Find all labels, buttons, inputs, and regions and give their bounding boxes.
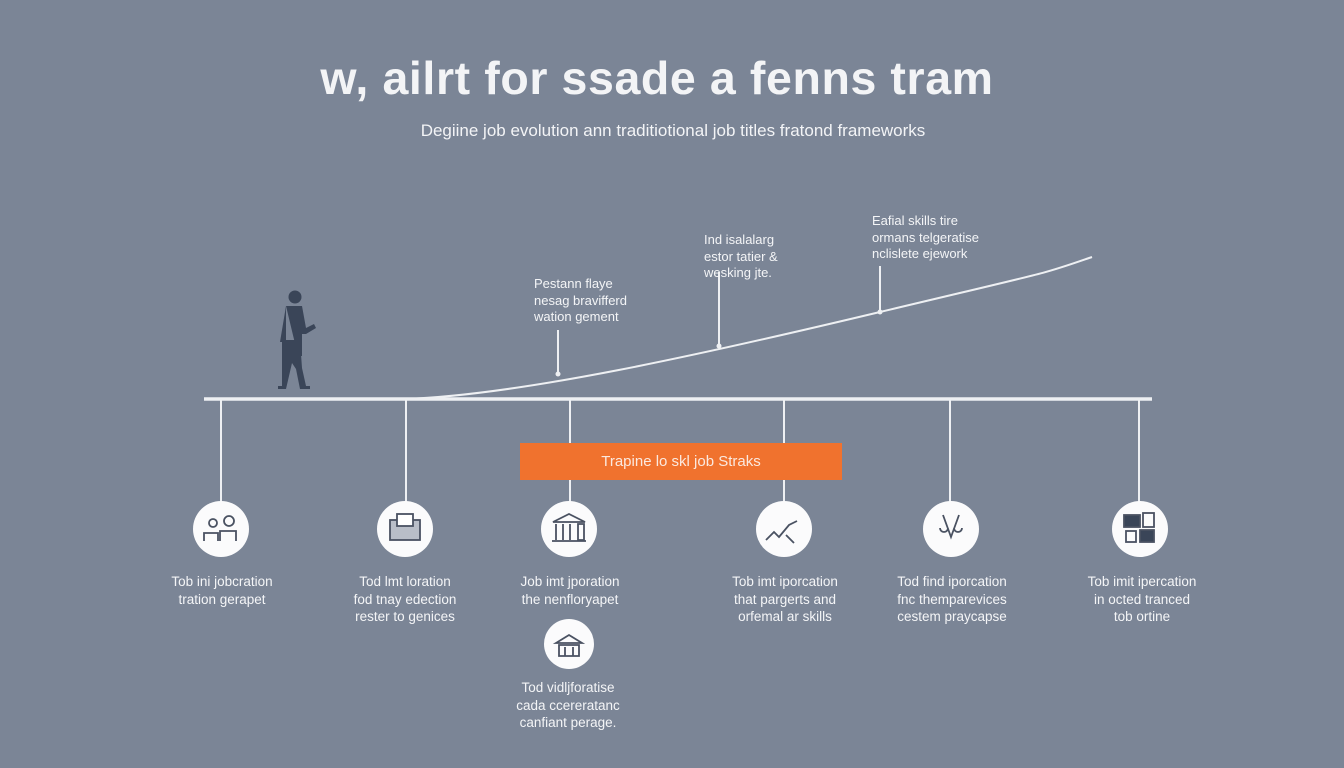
text: item 6: Tob imit ipercation <box>1088 574 1196 589</box>
callout: milestone 2: wesking jte. <box>704 265 772 280</box>
callout: milestone 3: Eafial skills tire <box>872 213 958 228</box>
text: item 3b: cada ccereratanc <box>516 698 620 712</box>
text: item 3 <box>520 574 620 607</box>
text: item 1: tration gerapet <box>178 592 266 606</box>
icon: person walking <box>278 290 316 389</box>
text: item 5 <box>897 574 1007 624</box>
text: item 6 <box>1088 574 1196 624</box>
subtitle: Degiine job evolution ann traditiotional job titles fratond frameworks <box>421 121 925 140</box>
text: item 3: Job imt jporation <box>520 574 620 589</box>
orange banner <box>520 443 842 480</box>
text: item 4: orfemal ar skills <box>738 609 832 624</box>
text: item 3b: canfiant perage. <box>520 715 616 730</box>
text: item 2 <box>354 574 456 624</box>
callout: milestone 1 <box>534 276 627 324</box>
text: item 6: tob ortine <box>1114 609 1170 624</box>
text: item 4 <box>732 574 838 624</box>
text: item 2: fod tnay edection <box>354 592 456 606</box>
orange banner: Trapine lo skl job Straks <box>601 453 761 470</box>
text: item 5: cestem praycapse <box>897 609 1007 624</box>
callout: milestone 3 <box>872 213 979 261</box>
callout: milestone 2: estor tatier & <box>704 248 778 264</box>
text: item 5: Tod find iporcation <box>897 574 1007 589</box>
text: item 3b: Tod vidljforatise <box>521 680 615 695</box>
text: item 3: the nenfloryapet <box>522 592 618 606</box>
callout: milestone 1: wation gement <box>534 309 619 324</box>
text: item 1 <box>171 574 273 607</box>
title: w, ailrt for ssade a fenns tram <box>320 52 994 104</box>
callout: milestone 3: nclislete ejework <box>872 246 967 261</box>
text: item 4: Tob imt iporcation <box>732 574 838 589</box>
text: item 6: in octed tranced <box>1094 592 1190 606</box>
callout: milestone 1: Pestann flaye <box>534 276 613 291</box>
callout: milestone 2: Ind isalalarg <box>704 232 774 247</box>
text: item 5: fnc themparevices <box>897 592 1007 606</box>
text: item 2: Tod lmt loration <box>359 574 451 589</box>
text: item 4: that pargerts and <box>734 592 836 606</box>
callout: milestone 1: nesag bravifferd <box>534 292 627 308</box>
text: item 2: rester to genices <box>355 609 455 624</box>
callout: milestone 2 <box>704 232 778 280</box>
callout: milestone 3: ormans telgeratise <box>872 230 979 244</box>
text: item 1: Tob ini jobcration <box>171 574 273 589</box>
text: item 3b <box>516 680 620 730</box>
